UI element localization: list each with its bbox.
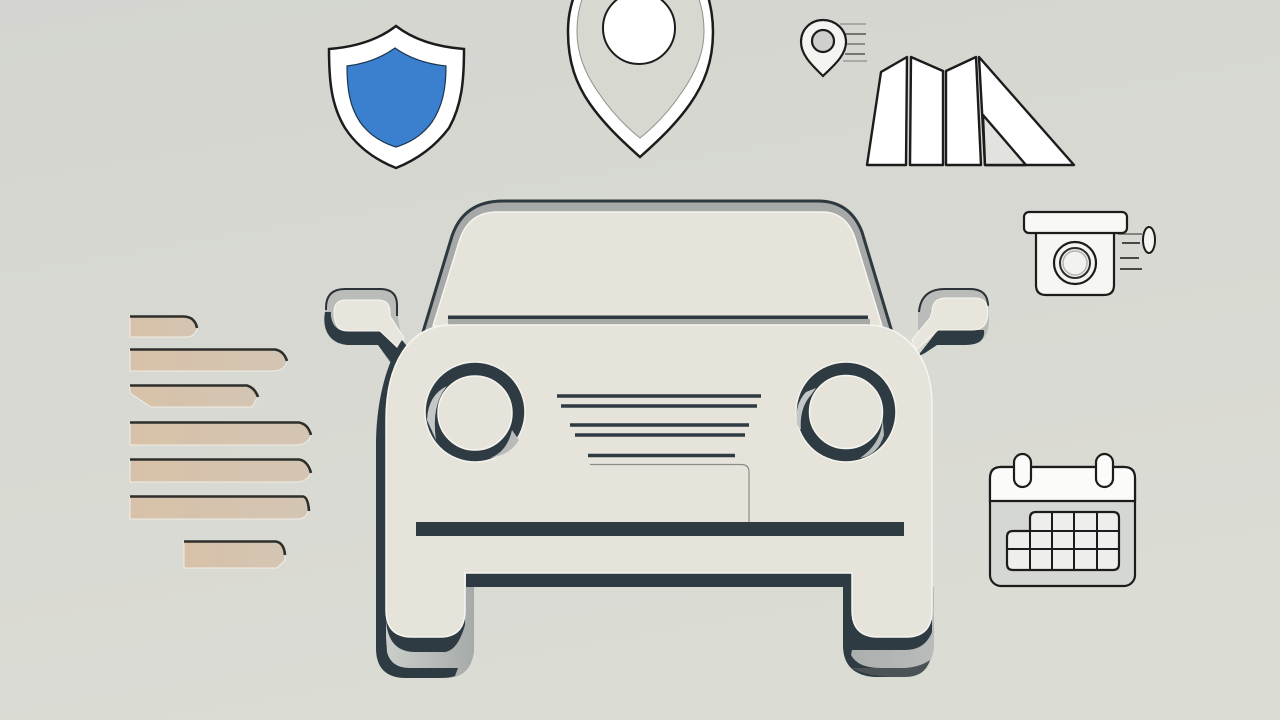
- windshield shadow: [423, 200, 892, 332]
- bar 2: [130, 349, 287, 371]
- licence plate outline: [590, 464, 749, 522]
- icon: folded map: [867, 57, 1074, 165]
- bar 7: [184, 541, 285, 568]
- bar 3: [130, 385, 258, 407]
- car: [324, 200, 989, 678]
- grille: [557, 396, 761, 456]
- car body: [386, 325, 932, 637]
- windshield: [433, 212, 882, 326]
- icon: calendar: [990, 454, 1135, 586]
- bar 6: [130, 496, 309, 519]
- bar 4: [130, 422, 311, 445]
- left headlight: [425, 362, 525, 462]
- chassis underline: [466, 573, 852, 587]
- left wheel shadow: [376, 440, 474, 678]
- left body edge: [376, 340, 410, 620]
- icon: camera: [1024, 212, 1155, 295]
- bar 1: [130, 316, 197, 337]
- icon: large location pin: [568, 0, 713, 157]
- list of tan bars: [130, 316, 311, 568]
- hood line: [448, 316, 870, 327]
- icon: small location pin: [801, 20, 867, 76]
- right wheel shadow: [843, 587, 934, 677]
- left mirror: [324, 288, 404, 366]
- icon: shield: [329, 26, 464, 168]
- bumper bar: [416, 522, 904, 536]
- bar 5: [130, 459, 311, 482]
- right headlight: [796, 362, 896, 462]
- right mirror: [912, 288, 989, 357]
